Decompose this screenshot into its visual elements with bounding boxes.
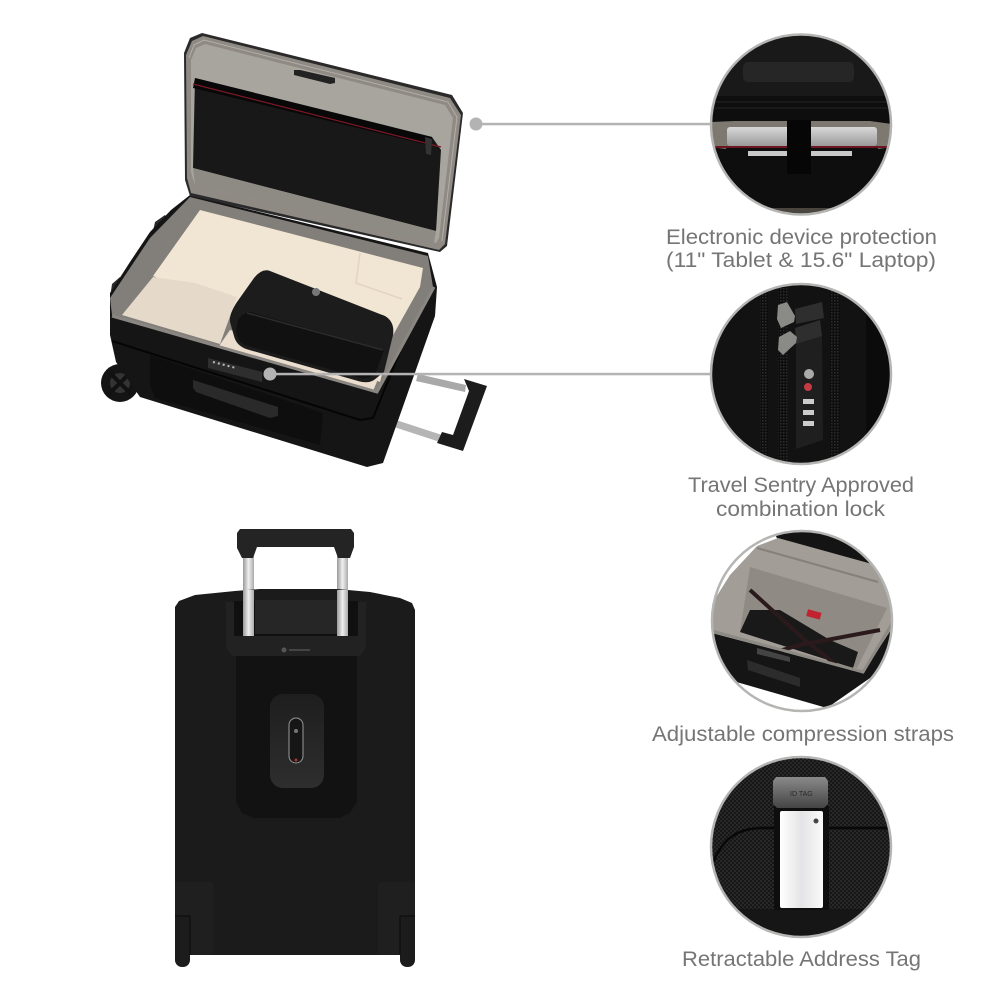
laptop — [727, 127, 877, 146]
lock strip — [757, 648, 790, 662]
caption: compression straps: Adjustable compression straps — [652, 723, 954, 746]
shirt pocket seam — [356, 253, 402, 299]
rear handle poles — [243, 556, 348, 638]
oval badge — [289, 718, 303, 763]
handle — [747, 660, 800, 687]
detail circle: compression straps — [708, 525, 900, 712]
tablet — [748, 151, 852, 156]
lower puller — [778, 331, 797, 355]
caption: device protection: (11" Tablet & 15.6" Laptop) — [666, 249, 936, 272]
tag head label: ID TAG — [790, 791, 813, 798]
taupe sleeve — [710, 121, 892, 149]
red zipper trim — [193, 84, 441, 147]
straps — [750, 590, 880, 668]
side handle bumps — [110, 215, 170, 298]
interior rim — [708, 538, 896, 673]
band seam — [710, 102, 892, 108]
callout: lid pocket — [470, 118, 712, 130]
top handle — [294, 70, 335, 84]
zipper band — [193, 78, 432, 146]
suitcase body — [110, 195, 437, 467]
red label — [806, 609, 822, 620]
combination wheels — [803, 399, 814, 426]
tag head — [773, 777, 828, 808]
tag slot — [774, 806, 829, 910]
rear panel — [236, 656, 357, 818]
rear logo — [282, 648, 310, 652]
rear body — [175, 589, 415, 955]
lower lid band — [193, 168, 436, 243]
tag icon — [814, 818, 818, 824]
handle housing — [226, 602, 366, 656]
bottom taupe — [772, 208, 830, 214]
white tag — [780, 811, 823, 908]
left corner guard — [175, 882, 213, 955]
lid seam — [757, 548, 878, 582]
zipper bands — [760, 288, 838, 460]
caption: lock: Travel Sentry Approved — [688, 474, 914, 497]
lock plate — [208, 358, 262, 382]
front handle — [193, 380, 278, 418]
toiletry pouch — [230, 270, 393, 382]
pouch logo — [312, 288, 320, 296]
right corner guard — [378, 882, 415, 955]
caption: lock: combination lock — [716, 498, 886, 521]
carry handle — [743, 62, 854, 82]
zipper pull — [425, 137, 432, 155]
cream shirt — [153, 210, 423, 382]
rear suitcase — [175, 529, 415, 967]
TSA mark — [804, 383, 812, 391]
interior — [110, 197, 433, 391]
detail circle: device protection — [710, 34, 892, 216]
handle recess — [234, 601, 358, 638]
lock plate — [796, 335, 823, 449]
black pouch — [740, 610, 858, 668]
inner wall — [740, 567, 887, 668]
caption: address tag: Retractable Address Tag — [682, 948, 921, 971]
poles in recess — [243, 590, 348, 636]
open suitcase — [101, 33, 487, 467]
front panel seam — [112, 282, 428, 420]
rear handle grip — [237, 529, 354, 558]
wheel wells — [175, 916, 415, 956]
suitcase body — [714, 630, 890, 707]
dial — [804, 369, 814, 379]
red trim — [715, 146, 887, 148]
lid seam lines — [189, 40, 457, 241]
rim highlight — [112, 287, 434, 392]
caption: lock — [688, 474, 914, 521]
top band — [718, 36, 884, 96]
mesh pocket — [193, 78, 441, 231]
upper puller tab — [795, 302, 824, 324]
lower puller tab — [795, 320, 822, 344]
detail circle: lock — [710, 283, 892, 465]
caption: device protection: Electronic device protection — [666, 226, 937, 249]
front panel — [150, 355, 323, 445]
lower beige garment — [219, 330, 384, 391]
handle plate — [270, 694, 324, 788]
rear wheels — [175, 915, 415, 967]
handle recess inner — [255, 600, 337, 634]
strap — [787, 121, 811, 156]
wheel — [101, 364, 139, 402]
detail circle: address tag — [710, 756, 892, 939]
rim — [708, 622, 893, 672]
lid — [184, 33, 463, 252]
upper puller — [777, 302, 795, 328]
piping — [712, 828, 892, 865]
lid back — [776, 532, 870, 564]
caption: device protection — [666, 226, 937, 272]
bottom band — [739, 909, 863, 936]
beige fold — [122, 277, 237, 344]
telescopic handle — [394, 374, 487, 451]
callout: lock — [264, 368, 712, 380]
